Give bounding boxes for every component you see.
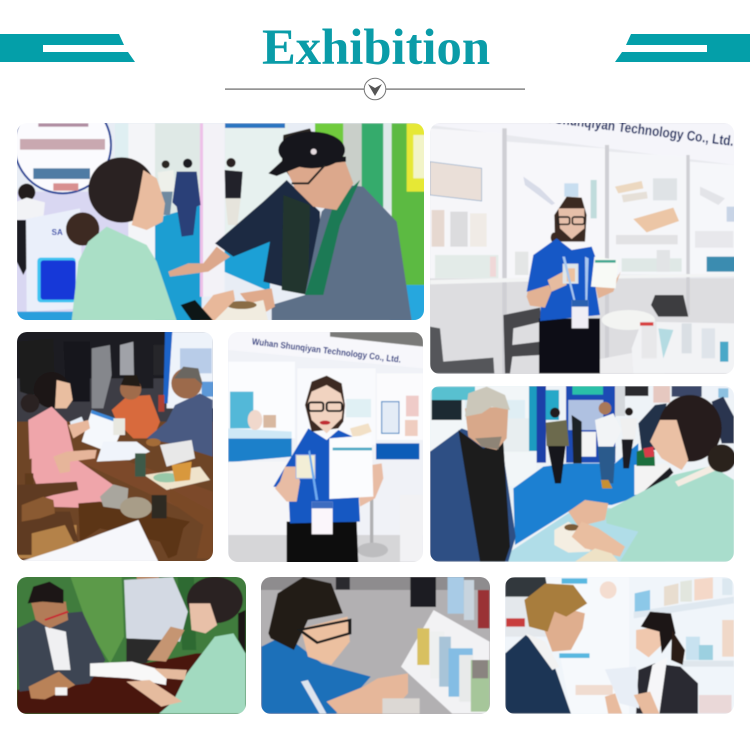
photo: meeting at tea table	[17, 332, 213, 561]
papers	[90, 662, 167, 685]
tea tray and cups	[135, 438, 210, 490]
documents on table	[70, 410, 150, 462]
tape roll and hands	[554, 500, 625, 562]
booth banner text: Wuhan Shunqiyan Technology Co., Ltd.	[251, 336, 402, 365]
left decorative banner	[0, 34, 135, 62]
crowd in background	[17, 332, 167, 408]
photo: woman in blue inspecting cosmetics shelf	[257, 575, 494, 717]
seated person at kiosk	[17, 184, 45, 275]
man in plaid shirt	[147, 367, 213, 457]
woman in black blazer with brochure	[605, 612, 698, 714]
woman in blue shirt	[261, 577, 420, 714]
cosmetics shelf	[401, 577, 489, 714]
wall product posters	[430, 162, 735, 248]
woman in mint jacket	[126, 577, 246, 714]
blue carpet	[513, 443, 638, 545]
wooden chair	[17, 458, 78, 555]
photo: man in blue jacket and woman with tape roll	[430, 386, 734, 562]
woman in pink dress	[21, 372, 113, 508]
standing man	[124, 569, 188, 663]
photo: woman in blue polo at white booth wall	[430, 123, 734, 374]
right decorative banner	[615, 34, 750, 62]
man in blue jacket	[430, 387, 516, 562]
brochure wall	[545, 577, 629, 714]
man in cap and grey jacket	[240, 132, 412, 321]
table	[80, 454, 212, 511]
shelf goods	[435, 250, 735, 278]
shelf products	[634, 577, 734, 713]
display stand	[357, 492, 423, 562]
folding chairs	[430, 295, 688, 373]
woman in mint jacket	[66, 157, 177, 321]
white product display with blue edge	[163, 332, 213, 408]
woman in mint jacket	[605, 395, 736, 562]
title: Exhibition	[262, 20, 490, 76]
white kiosk with blue screen: SA	[52, 228, 63, 237]
tape roll and phone	[181, 290, 268, 322]
table	[17, 653, 246, 714]
circular product display	[17, 123, 113, 195]
kettle and pot	[78, 484, 190, 558]
photo: visitors at booth with green wall	[17, 123, 424, 320]
title divider with chevron icon	[225, 78, 525, 100]
distant visitors	[158, 158, 243, 237]
hall background and blue booth	[431, 386, 729, 464]
flowers and white pedestal	[633, 446, 656, 496]
man in orange sweater	[112, 375, 160, 438]
woman holding documents	[273, 376, 383, 563]
photo: man and woman discussing brochure	[499, 575, 741, 717]
table and product display	[595, 310, 735, 373]
woman holding samples	[527, 197, 621, 373]
white kiosk with blue screen	[26, 208, 83, 312]
photo: woman with documents at Shunqiyan booth	[227, 330, 427, 563]
man in dark jacket	[168, 128, 322, 297]
distant visitors	[546, 397, 734, 488]
glass counter	[508, 508, 638, 562]
brochures on floor	[20, 520, 158, 562]
photo: handshake meeting with documents	[10, 569, 257, 720]
man in navy blazer	[505, 583, 587, 714]
man in suit with red glasses	[17, 582, 105, 699]
poster panels	[228, 362, 423, 462]
